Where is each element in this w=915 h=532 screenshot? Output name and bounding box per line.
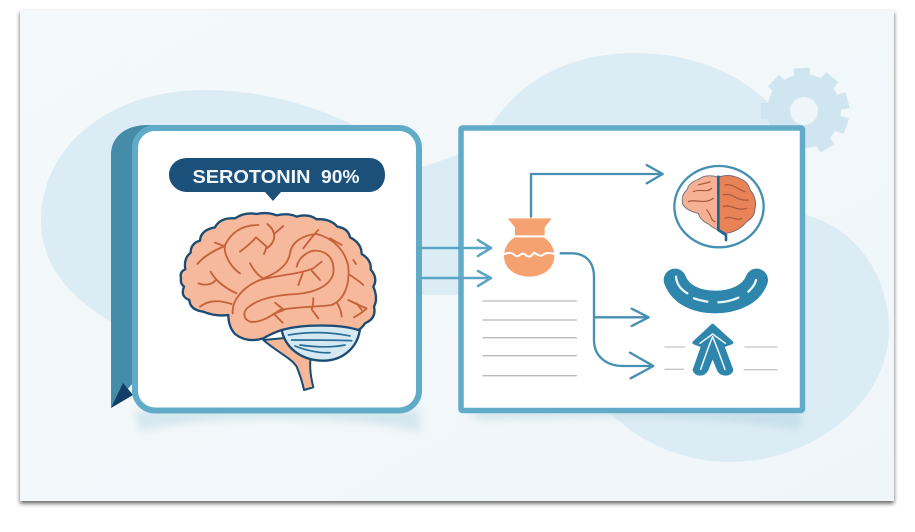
icon: curved gut band <box>675 277 757 302</box>
icon: double up arrow <box>694 325 732 374</box>
ground shadows <box>135 410 802 432</box>
connector arrows between panels <box>420 240 491 286</box>
cerebrum folds <box>197 224 367 323</box>
cerebellum folds <box>288 333 352 353</box>
brain stem <box>263 337 313 390</box>
right panel artwork <box>483 165 777 378</box>
text placeholder lines right <box>665 347 777 370</box>
label: serotonin pill: SEROTONIN <box>192 166 310 187</box>
panel: pathways <box>461 128 802 410</box>
panel frame <box>461 128 802 410</box>
arrow: to brain <box>531 165 663 217</box>
arrow: branching to gut <box>561 253 653 378</box>
spine fold <box>111 383 133 408</box>
cerebrum <box>181 213 376 340</box>
decorative background blobs <box>41 53 889 462</box>
text placeholder lines left <box>483 301 576 376</box>
icon: brain in circle <box>674 166 764 247</box>
label: serotonin pill: 90% <box>321 166 360 187</box>
cerebellum <box>282 325 360 361</box>
label: serotonin pill <box>169 158 385 201</box>
white panel <box>135 128 419 410</box>
panel: serotonin brain <box>111 125 419 410</box>
icon: brain <box>181 213 376 390</box>
icon: orange urn <box>504 218 555 277</box>
icon: gear <box>761 68 850 155</box>
book spine <box>111 125 170 408</box>
